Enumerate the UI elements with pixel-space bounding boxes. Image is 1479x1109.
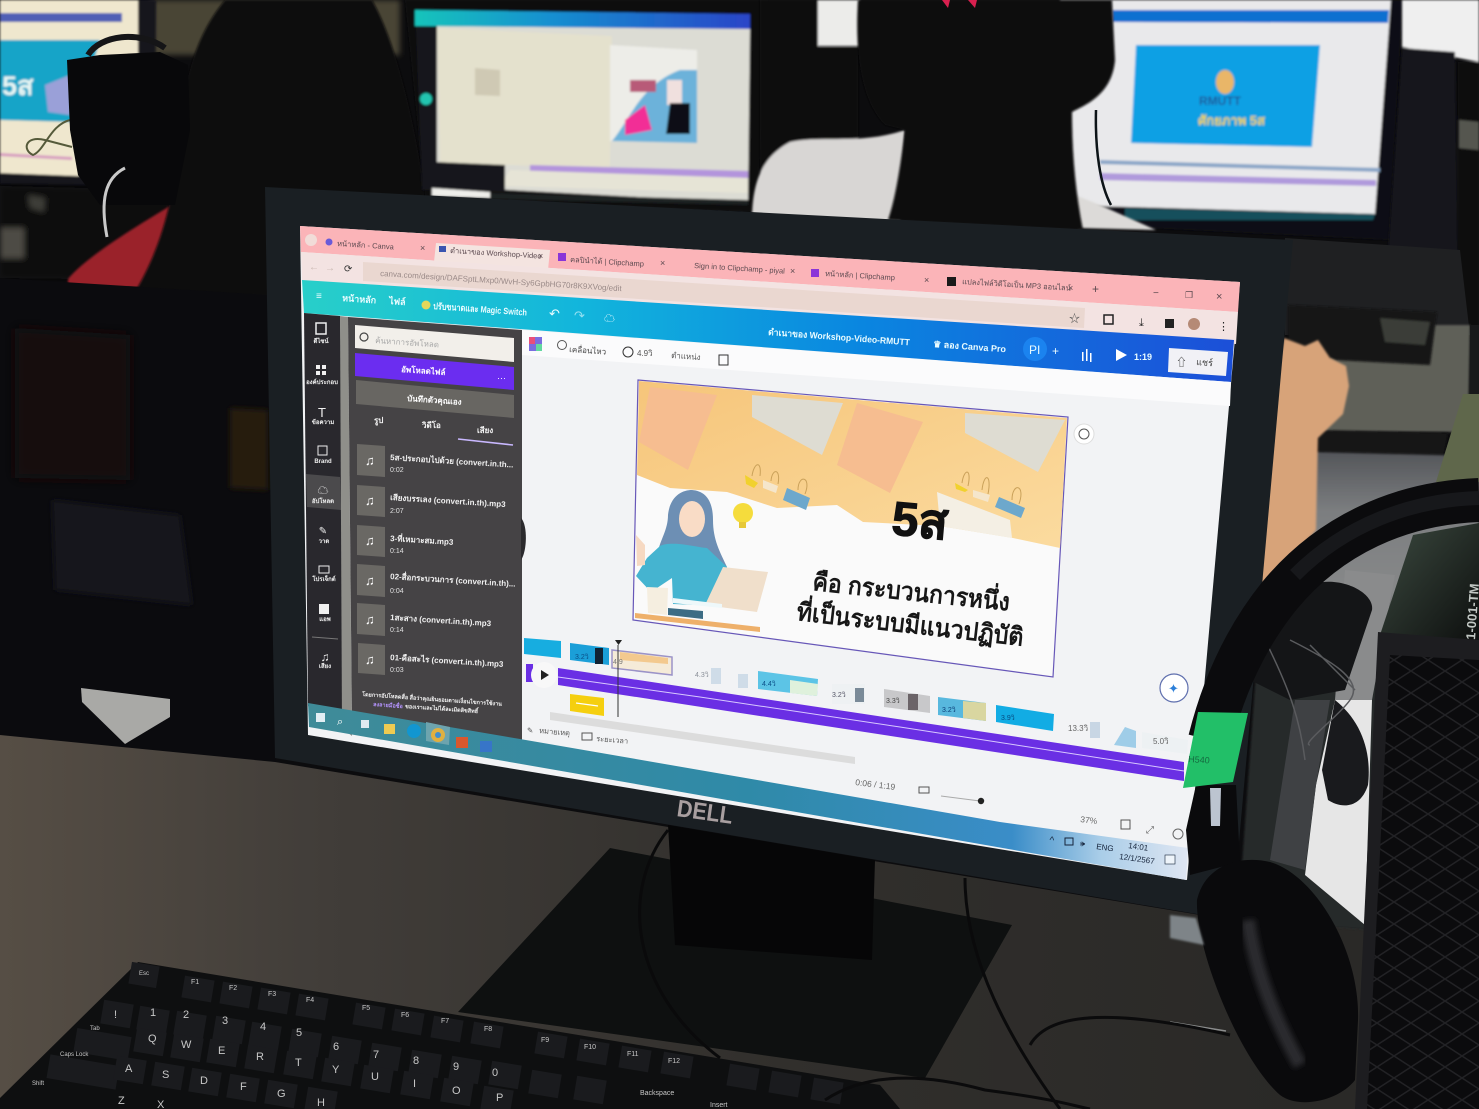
red shirt of left person bbox=[68, 203, 190, 290]
clip 3.3: 3.3วิ bbox=[886, 697, 900, 705]
background region behind screen on right bbox=[1285, 238, 1479, 650]
ear cup highlight bbox=[1248, 920, 1300, 1065]
active tab bbox=[434, 243, 550, 270]
clip selected: 4.9 bbox=[613, 659, 623, 666]
canvas toolbar: เคลื่อนไหว bbox=[569, 343, 607, 357]
canva top bar labels: ↷ bbox=[574, 308, 585, 323]
key legends: F5 bbox=[362, 1005, 370, 1012]
ear cup bbox=[1197, 860, 1358, 1102]
tower side panel bbox=[1380, 523, 1479, 642]
clip 3.2 blue: 3.2วิ bbox=[942, 706, 956, 714]
clip label 4.3 bbox=[695, 668, 748, 688]
canva top bar labels: ปรับขนาดและ Magic Switch bbox=[433, 301, 527, 318]
key legends: 3 bbox=[222, 1015, 228, 1027]
purple audio track bbox=[558, 668, 1184, 781]
key legends: R bbox=[256, 1051, 264, 1063]
address url: canva.com/design/DAFSptLMxp0/WvH-Sy6GpbHG70r8K9XVog/edit bbox=[380, 269, 623, 293]
playhead bbox=[615, 640, 622, 717]
timeline scrollbar bbox=[550, 712, 855, 764]
key legends: E bbox=[218, 1045, 225, 1057]
headset bbox=[1183, 498, 1479, 1102]
browser tab labels: หน้าหลัก | Clipchamp bbox=[825, 269, 895, 282]
key legends: P bbox=[496, 1092, 503, 1104]
background wall top left bbox=[150, 0, 400, 55]
clip cyan 3.9 bbox=[996, 705, 1054, 731]
yellow audio clip bbox=[570, 694, 604, 716]
key legends: H bbox=[317, 1097, 325, 1109]
monitor screen bbox=[300, 226, 1240, 880]
audio list item 3: 0:14 bbox=[390, 548, 404, 555]
clip blue triangle bbox=[1114, 727, 1136, 748]
windows taskbar bbox=[308, 703, 1188, 880]
key legends: F8 bbox=[484, 1026, 492, 1033]
RMUTT logo on right monitor: RMUTT bbox=[1199, 94, 1242, 108]
white notepads bbox=[752, 395, 843, 455]
upload button: อัพโหลดไฟล์ bbox=[401, 364, 446, 377]
sidebar labels: เสียง bbox=[319, 662, 331, 670]
keycaps bbox=[46, 962, 844, 1109]
mini canva bar bbox=[415, 10, 750, 29]
clip 13.3: 13.3วิ bbox=[1068, 724, 1088, 733]
white tag on chair bbox=[81, 688, 170, 744]
taskbar icons bbox=[316, 713, 492, 752]
clip 3.2: 3.2วิ bbox=[832, 691, 846, 699]
sidebar labels: ♫ bbox=[320, 650, 330, 664]
stand neck bbox=[668, 825, 875, 960]
tablet bbox=[705, 567, 768, 612]
tray: 🕪 bbox=[1080, 839, 1085, 848]
clip 13.3 bbox=[1068, 722, 1100, 738]
audio list item 1: 0:02 bbox=[390, 467, 404, 474]
key legends: D bbox=[200, 1075, 208, 1087]
background person with white shirt bbox=[752, 0, 905, 225]
tray: 14:01 bbox=[1128, 841, 1149, 853]
panel tabs bbox=[374, 416, 513, 445]
audio list item 5: ♫ bbox=[365, 612, 375, 627]
sidebar labels: ดีไซน์ bbox=[313, 337, 329, 345]
audio list item 6: 01-คือสะไร (convert.in.th).mp3 bbox=[390, 652, 504, 669]
clip 5.0: 5.0วิ bbox=[1153, 737, 1169, 746]
panel note bbox=[361, 690, 502, 715]
tape text: H540 bbox=[1188, 754, 1210, 765]
panel tabs: วิดีโอ bbox=[421, 420, 441, 430]
canva top bar labels: ≡ bbox=[316, 291, 322, 302]
sidebar labels: อัปโหลด bbox=[312, 497, 334, 505]
key legends: T bbox=[295, 1057, 302, 1069]
side panel scrollbar bbox=[340, 316, 352, 736]
taskbar icons: ⌕ bbox=[337, 716, 343, 728]
nav buttons bbox=[309, 262, 353, 275]
key legends: Tab bbox=[90, 1026, 100, 1032]
audio list item 6 bbox=[358, 643, 504, 675]
monitor stand bbox=[458, 825, 1060, 1109]
headphone wire bbox=[1096, 110, 1111, 205]
record button bbox=[356, 380, 514, 418]
key legends: 9 bbox=[453, 1061, 459, 1073]
key legends: S bbox=[162, 1069, 169, 1081]
person head and ponytail bbox=[857, 0, 1115, 230]
mesh bbox=[1367, 655, 1479, 1109]
canva top bar labels: 1:19 bbox=[1134, 352, 1152, 362]
share button bbox=[1168, 348, 1228, 376]
white surface bbox=[1305, 700, 1372, 925]
left icon sidebar bbox=[304, 313, 348, 733]
monitor frame bbox=[265, 187, 1293, 920]
lower band bbox=[1186, 785, 1240, 875]
browser tab labels: × bbox=[420, 243, 425, 253]
raised hand bbox=[636, 535, 645, 566]
browser address bar bbox=[301, 252, 1238, 344]
light bulb bbox=[733, 503, 753, 523]
canva top bar labels: ☁ bbox=[604, 313, 615, 325]
key legends: F1 bbox=[191, 979, 199, 986]
canva top bar bbox=[302, 280, 1234, 382]
shirt left bbox=[752, 130, 905, 225]
record button: บันทึกตัวคุณเอง bbox=[407, 394, 462, 408]
tray: 12/1/2567 bbox=[1119, 852, 1156, 866]
slide body line 1: คือ กระบวนการหนึ่ง bbox=[811, 564, 1012, 617]
browser toolbar icons: ☆ bbox=[1069, 312, 1080, 325]
key legends: 0 bbox=[492, 1067, 498, 1079]
key legends: Y bbox=[332, 1064, 340, 1076]
browser tab labels: ❐ bbox=[1185, 290, 1193, 300]
panel collapse handle bbox=[521, 518, 526, 560]
sticker bbox=[1210, 788, 1221, 826]
playback time and zoom controls bbox=[855, 777, 1183, 839]
audio list item 2: เสียงบรรเลง (convert.in.th).mp3 bbox=[390, 492, 506, 509]
playback time and zoom controls: 0:06 / 1:19 bbox=[855, 777, 896, 792]
playback time and zoom controls: 37% bbox=[1080, 814, 1098, 826]
key legends: Shift bbox=[32, 1081, 44, 1087]
key legends: F12 bbox=[668, 1058, 680, 1065]
dark stand behind person bbox=[760, 0, 858, 215]
white bar bbox=[673, 598, 722, 608]
background area below left monitor bbox=[0, 186, 170, 280]
clip cyan 3.9: 3.9วิ bbox=[1001, 714, 1015, 722]
key legends bbox=[32, 971, 728, 1109]
notes and duration buttons bbox=[527, 726, 629, 746]
clip 3.2 bbox=[832, 684, 865, 704]
notes and duration buttons: ✎ bbox=[527, 726, 533, 735]
background monitor left bbox=[0, 0, 156, 186]
browser tab labels: × bbox=[924, 275, 929, 285]
grey light strip bbox=[1335, 570, 1395, 700]
orange notebooks bbox=[639, 387, 717, 470]
canva top bar labels: + bbox=[1052, 344, 1059, 358]
behind headset: dark gear and white surface bbox=[1238, 570, 1395, 930]
browser tab labels bbox=[326, 238, 1222, 303]
cables bbox=[1265, 640, 1355, 760]
keyboard bbox=[0, 962, 900, 1109]
headband bbox=[1210, 500, 1479, 740]
pants bbox=[668, 608, 703, 619]
key legends: Insert bbox=[710, 1102, 728, 1109]
key legends: 5 bbox=[296, 1027, 302, 1039]
grey column bbox=[1270, 700, 1330, 870]
clip 5.0 bbox=[1142, 732, 1188, 754]
tray bbox=[1049, 835, 1175, 866]
green tape label bbox=[1183, 712, 1248, 788]
background monitor right bbox=[1060, 0, 1403, 240]
browser toolbar icons: ⤓ bbox=[1139, 317, 1144, 329]
canvas toolbar bbox=[522, 330, 1231, 406]
audio list item 3: 3-ที่เหมาะสม.mp3 bbox=[390, 532, 454, 547]
binder clips bbox=[745, 465, 1025, 518]
tray: ENG bbox=[1096, 842, 1114, 853]
key legends: I bbox=[413, 1078, 416, 1090]
canva top bar labels: ♛ ลอง Canva Pro bbox=[933, 339, 1007, 354]
mini slide with illustration bbox=[610, 45, 697, 143]
browser tab labels: คลปินำได้ | Clipchamp bbox=[570, 255, 644, 269]
clip blue 4.4 bbox=[758, 671, 818, 696]
white wall patch bbox=[818, 0, 860, 46]
browser tab labels: + bbox=[1092, 282, 1099, 296]
share button: ⇧ bbox=[1176, 355, 1187, 369]
playback time and zoom controls: ⤢ bbox=[1146, 825, 1154, 836]
audio list item 4: ♫ bbox=[365, 573, 375, 588]
key legends: 6 bbox=[333, 1041, 339, 1053]
audio list item 1: 5ส-ประกอบไปด้วย (convert.in.th... bbox=[390, 452, 514, 470]
desk edge line bbox=[1170, 1022, 1226, 1031]
notes and duration buttons: ระยะเวลา bbox=[596, 734, 629, 746]
key legends: F2 bbox=[229, 985, 237, 992]
browser tab labels: × bbox=[538, 251, 543, 261]
nav buttons: ← bbox=[309, 262, 319, 273]
key legends: Backspace bbox=[640, 1090, 674, 1097]
key legends: F3 bbox=[268, 991, 276, 998]
left person hair bbox=[135, 0, 424, 300]
wire on left monitor bbox=[27, 120, 72, 155]
AI assistant circle bbox=[1160, 674, 1188, 702]
sweater bbox=[636, 544, 727, 606]
sidebar labels: แอพ bbox=[319, 616, 331, 623]
grey green wall bbox=[1318, 325, 1470, 432]
hair tie bbox=[942, 0, 977, 8]
key legends: Z bbox=[118, 1095, 125, 1107]
slide bbox=[633, 380, 1068, 677]
illustration person bbox=[635, 490, 768, 632]
key legends: W bbox=[181, 1039, 192, 1051]
cup bbox=[647, 587, 668, 615]
audio list item 6: ♫ bbox=[365, 652, 375, 667]
canva top bar labels bbox=[316, 291, 1152, 362]
sidebar labels: องค์ประกอบ bbox=[306, 378, 338, 386]
canvas toolbar: ตำแหน่ง bbox=[671, 351, 701, 362]
panel tabs: เสียง bbox=[477, 425, 493, 435]
panel tabs: รูป bbox=[374, 416, 383, 426]
clip label 4.3: 4.3วิ bbox=[695, 671, 709, 679]
key legends: F9 bbox=[541, 1037, 549, 1044]
key legends: F10 bbox=[584, 1044, 596, 1051]
key legends: F bbox=[240, 1081, 247, 1093]
panel note: โดยการอัปโหลดสื่อ สื่อว่าคุณยินยอมตามเงื่อนไขการใช้งาน bbox=[361, 690, 502, 708]
browser toolbar icons: ⋮ bbox=[1218, 321, 1229, 333]
sidebar labels: Brand bbox=[314, 459, 332, 465]
search box bbox=[355, 325, 514, 362]
dark blob bbox=[1322, 700, 1369, 805]
browser tab labels: × bbox=[1068, 283, 1073, 293]
key legends: F4 bbox=[306, 997, 314, 1004]
audio list item 5: 0:14 bbox=[390, 627, 404, 634]
sidebar labels: ข้อความ bbox=[312, 418, 334, 426]
share button: แชร์ bbox=[1196, 356, 1213, 368]
key legends: Q bbox=[148, 1033, 157, 1045]
timeline play button bbox=[526, 662, 557, 688]
desk reflection near ear cup bbox=[1170, 915, 1204, 945]
keyboard behind bbox=[1288, 305, 1437, 365]
file dialog window bbox=[437, 28, 612, 168]
canvas toolbar: 4.9วิ bbox=[637, 349, 653, 358]
clip 3.2 blue bbox=[938, 697, 986, 721]
screen base bbox=[300, 226, 1240, 880]
headband highlight bbox=[1295, 498, 1479, 575]
desk surface bbox=[0, 735, 1380, 1109]
background monitor middle bbox=[405, 0, 768, 212]
panel note: ของเราและไม่ได้ละเมิดลิขสิทธิ์ bbox=[405, 702, 480, 715]
dark ledge bbox=[1318, 430, 1448, 455]
browser tab labels: หน้าหลัก - Canva bbox=[337, 239, 395, 252]
audio list item 3: ♫ bbox=[365, 533, 375, 548]
clip blue 2 bbox=[570, 643, 609, 665]
address pill bbox=[363, 262, 1085, 328]
paper piece right of title bbox=[937, 492, 1012, 538]
RMUTT logo on right monitor: ศักยภาพ 5ส bbox=[1198, 113, 1265, 128]
audio list item 3 bbox=[357, 525, 454, 557]
left monitor heading: 5ส bbox=[2, 71, 34, 101]
audio list item 1: ♫ bbox=[365, 453, 375, 468]
sidebar labels bbox=[306, 323, 341, 670]
key legends: 2 bbox=[183, 1009, 189, 1021]
browser tab labels: Sign in to Clipchamp - piyal bbox=[694, 261, 785, 276]
key legends: A bbox=[125, 1063, 133, 1075]
hand on mouse bbox=[1255, 338, 1349, 592]
orange desk line bbox=[635, 613, 760, 632]
key legends: Caps Lock bbox=[60, 1052, 89, 1058]
audio list item 5: 1สะสาง (convert.in.th).mp3 bbox=[390, 613, 492, 628]
clip 3.3 bbox=[884, 689, 930, 713]
browser toolbar icons bbox=[1069, 312, 1229, 333]
chair back left bbox=[0, 278, 276, 768]
audio list item 4: 02-สื่อกระบวนการ (convert.in.th)... bbox=[390, 570, 516, 589]
olive box bbox=[1436, 394, 1479, 482]
sidebar labels: ☁ bbox=[318, 485, 328, 497]
canva top bar labels: ดำเนาของ Workshop-Video-RMUTT bbox=[768, 327, 911, 347]
browser tab labels: ดำเนาของ Workshop-Video bbox=[450, 246, 542, 261]
key legends: ! bbox=[114, 1009, 117, 1021]
audio list item 2: ♫ bbox=[365, 493, 375, 508]
headphone cable on desk bbox=[825, 1017, 1230, 1109]
key legends: 1 bbox=[150, 1007, 156, 1019]
slide title 5ส: 5ส bbox=[890, 493, 951, 550]
notes and duration buttons: หมายเหตุ bbox=[539, 726, 570, 738]
browser tab labels: × bbox=[1216, 291, 1222, 303]
stand base bbox=[458, 848, 1012, 1078]
canva top bar labels: PI bbox=[1029, 343, 1040, 357]
audio list item 1 bbox=[357, 444, 514, 477]
key legends: 8 bbox=[413, 1055, 419, 1067]
RMUTT logo on right monitor bbox=[1198, 70, 1265, 128]
sidebar labels: โปรเจ็กต์ bbox=[311, 574, 336, 583]
top right white wall and dark stand bbox=[1385, 0, 1479, 340]
key legends: F11 bbox=[627, 1051, 639, 1058]
slide photo background bbox=[637, 381, 1067, 548]
DELL logo: DELL bbox=[675, 795, 735, 830]
audio list item 2: 2:07 bbox=[390, 508, 404, 515]
sidebar labels: วาด bbox=[319, 538, 329, 545]
sidebar labels: T bbox=[318, 405, 326, 420]
timeline clips bbox=[524, 638, 1188, 754]
upload button: ··· bbox=[497, 373, 506, 383]
face bbox=[679, 501, 705, 537]
cable bbox=[640, 830, 1060, 1109]
AI assistant circle: ✦ bbox=[1168, 681, 1179, 696]
refresh icon beside slide bbox=[1074, 424, 1094, 444]
audio list item 6: 0:03 bbox=[390, 667, 404, 674]
top dark blob bbox=[1250, 582, 1372, 700]
key legends: G bbox=[277, 1088, 286, 1100]
canva top bar labels: ↶ bbox=[549, 306, 560, 321]
key legends: Esc bbox=[139, 971, 149, 977]
clip blue 4.4: 4.4วิ bbox=[762, 680, 776, 688]
hair bbox=[658, 490, 727, 570]
mini timeline bbox=[530, 165, 748, 178]
side panel bbox=[348, 317, 522, 742]
key legends: U bbox=[371, 1071, 379, 1083]
lower grey surface bbox=[1300, 452, 1479, 650]
browser tab labels: × bbox=[790, 266, 795, 276]
audio list item 2 bbox=[357, 485, 506, 517]
key legends: 4 bbox=[260, 1021, 266, 1033]
audio list item 4 bbox=[357, 564, 516, 597]
background headset left bbox=[67, 37, 190, 237]
tray: ^ bbox=[1049, 835, 1055, 847]
browser tab labels: แปลงไฟล์วิดีโอเป็น MP3 ออนไลน์ bbox=[962, 276, 1071, 293]
key legends: F6 bbox=[401, 1012, 409, 1019]
slide body line 2: ที่เป็นระบบมีแนวปฏิบัติ bbox=[795, 594, 1025, 652]
audio list item 5 bbox=[357, 603, 492, 636]
mini sidebar bbox=[416, 26, 437, 190]
canva top bar labels: ไฟล์ bbox=[388, 295, 406, 307]
tower front bbox=[1355, 632, 1479, 1109]
dark strip right bbox=[1470, 325, 1479, 396]
clip selected bbox=[612, 650, 672, 675]
canva top bar labels: หน้าหลัก bbox=[342, 293, 377, 305]
browser tab labels: − bbox=[1153, 288, 1159, 299]
key legends: 7 bbox=[373, 1049, 379, 1061]
sidebar labels: ✎ bbox=[319, 526, 327, 537]
upload button bbox=[355, 353, 514, 390]
clip cyan 1 bbox=[524, 638, 561, 658]
tab chevron bbox=[305, 234, 317, 246]
panel note: ลงลายมือชื่อ bbox=[373, 700, 403, 710]
key legends: O bbox=[452, 1085, 461, 1097]
search box: ค้นหาการอัพโหลด bbox=[375, 335, 439, 349]
audio list item 4: 0:04 bbox=[390, 588, 404, 595]
clip blue 2: 3.2วิ bbox=[575, 653, 589, 661]
nav buttons: → bbox=[325, 263, 335, 274]
right shirt sliver bbox=[1075, 195, 1156, 230]
nav buttons: ⟳ bbox=[344, 264, 353, 275]
key legends: F7 bbox=[441, 1018, 449, 1025]
browser tab strip bbox=[300, 226, 1240, 312]
PC tower bbox=[1355, 523, 1479, 1109]
browser tab labels: × bbox=[660, 258, 665, 268]
